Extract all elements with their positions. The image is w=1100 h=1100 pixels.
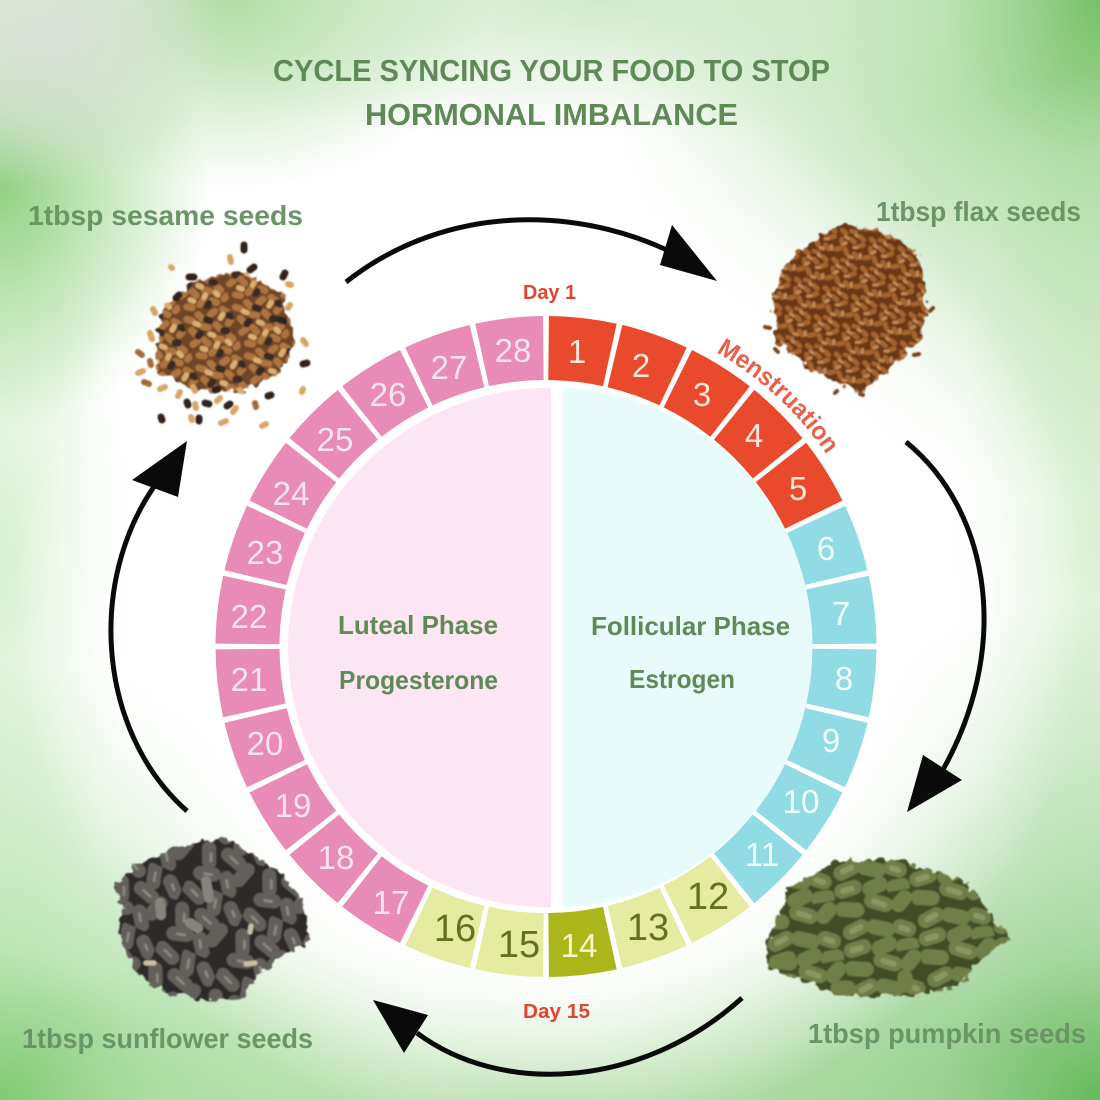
seed label: sunflower: 1tbsp sunflower seeds <box>22 1023 313 1054</box>
day 17 <box>339 850 431 943</box>
day 19: 19 <box>275 787 311 824</box>
seed label: pumpkin: 1tbsp pumpkin seeds <box>808 1018 1086 1049</box>
day 25 <box>289 385 387 482</box>
day 23 <box>224 504 308 586</box>
day 13 <box>595 882 687 975</box>
day 19 <box>244 754 341 851</box>
day 11 <box>705 811 803 908</box>
day 21: 21 <box>231 661 267 698</box>
day 6 <box>782 505 874 597</box>
day 8: 8 <box>835 660 853 697</box>
day 28 <box>475 309 557 392</box>
day 7 <box>800 575 884 658</box>
day 1: 1 <box>568 333 586 370</box>
day 26: 26 <box>370 376 406 413</box>
day 2 <box>606 325 688 408</box>
follicular phase text <box>591 611 790 694</box>
day 28: 28 <box>495 332 531 369</box>
title <box>273 53 830 132</box>
seeds: flax <box>760 215 940 400</box>
day 3 <box>661 350 753 443</box>
luteal half disc <box>288 388 551 908</box>
luteal phase text <box>338 610 498 695</box>
day 12: 12 <box>687 876 729 918</box>
day 14 <box>535 901 617 984</box>
day 9: 9 <box>822 722 840 759</box>
day 27: 27 <box>431 349 467 386</box>
day 15 <box>475 907 544 977</box>
day 21 <box>208 635 292 718</box>
menstruation curved label: Menstruation <box>718 338 836 454</box>
day 22 <box>216 576 286 644</box>
day 23: 23 <box>247 534 283 571</box>
day 20 <box>218 696 310 788</box>
follicular phase text: Estrogen <box>629 664 735 694</box>
day 4: 4 <box>745 417 763 454</box>
day 25: 25 <box>317 421 353 458</box>
luteal phase text: Luteal Phase <box>338 610 498 640</box>
follicular phase text: Follicular Phase <box>591 611 790 641</box>
seeds: sesame <box>130 245 310 426</box>
title: HORMONAL IMBALANCE <box>365 97 738 132</box>
day 13: 13 <box>627 907 669 949</box>
day 12 <box>653 851 750 949</box>
day 1 <box>548 316 617 386</box>
day 8 <box>806 649 876 717</box>
arrow: bottom, pumpkin to sunflower <box>373 998 742 1074</box>
day 17: 17 <box>373 884 409 921</box>
seeds: pumpkin <box>760 852 1015 1004</box>
day 16 <box>404 885 486 968</box>
day 20: 20 <box>247 725 283 762</box>
day 27 <box>405 318 497 411</box>
follicular half disc <box>563 388 814 908</box>
day 18 <box>285 806 382 903</box>
day 15 marker: Day 15 <box>523 1001 590 1023</box>
cycle wheel <box>208 309 884 984</box>
day 5: 5 <box>789 470 807 507</box>
day 2: 2 <box>632 347 650 384</box>
day 26 <box>342 344 439 442</box>
day 22: 22 <box>231 598 267 635</box>
seeds: sunflower <box>112 836 312 1003</box>
day 7: 7 <box>832 595 850 632</box>
day 5 <box>751 442 848 539</box>
day 6: 6 <box>817 530 835 567</box>
day 10 <box>750 762 843 854</box>
day 9 <box>784 707 868 789</box>
day 10: 10 <box>783 783 819 820</box>
day 1 marker: Day 1 <box>523 282 576 304</box>
day 16: 16 <box>434 908 476 950</box>
arrow: left, sunflower to sesame <box>111 441 187 811</box>
day 15: 15 <box>498 924 540 966</box>
day 3: 3 <box>693 376 711 413</box>
day 24: 24 <box>273 475 309 512</box>
day 24 <box>249 439 342 531</box>
luteal phase text: Progesterone <box>339 665 498 695</box>
day 4 <box>710 390 807 487</box>
arrow: right, flax to pumpkin <box>906 442 984 812</box>
title: CYCLE SYNCING YOUR FOOD TO STOP <box>273 53 830 88</box>
day 14: 14 <box>561 927 597 964</box>
seed label: sesame: 1tbsp sesame seeds <box>28 200 303 231</box>
seed label: flax: 1tbsp flax seeds <box>876 196 1081 227</box>
arrow: top, sesame to flax <box>346 220 717 282</box>
day 18: 18 <box>318 839 354 876</box>
day 11: 11 <box>745 836 779 873</box>
